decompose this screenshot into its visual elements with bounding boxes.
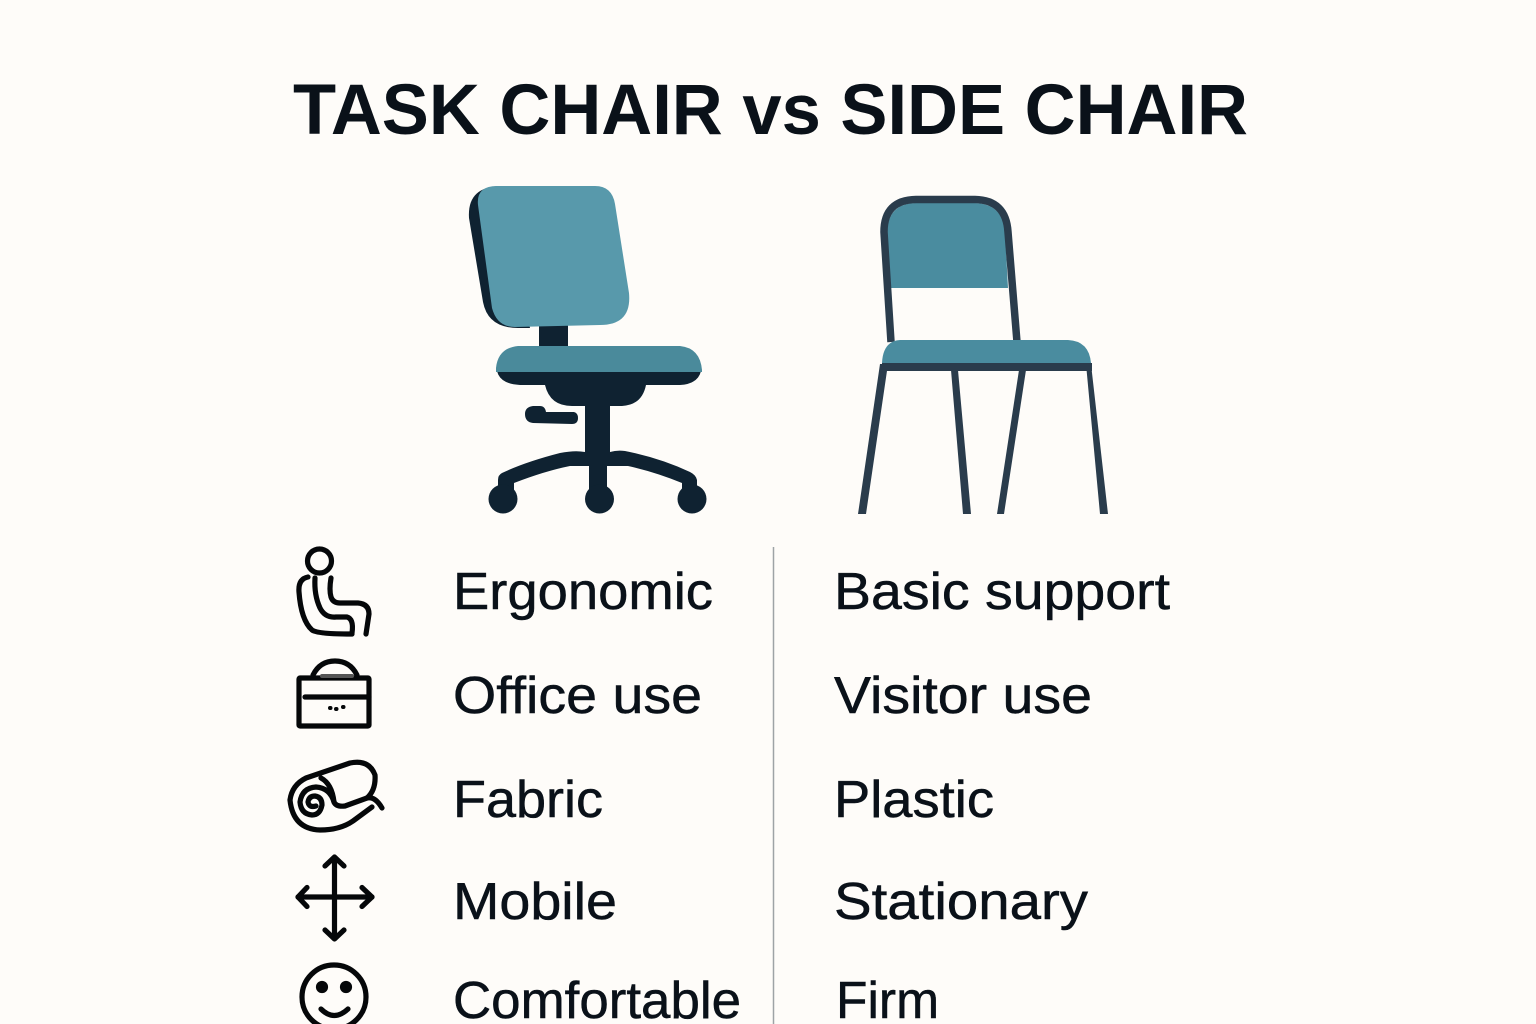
right column labels: Visitor use: [834, 667, 1092, 725]
left column labels: Mobile: [453, 873, 617, 931]
illustration: side chair: [858, 200, 1108, 514]
icon: smiley: [302, 965, 366, 1024]
left column labels: Ergonomic: [453, 563, 713, 621]
left column labels: Fabric: [453, 771, 603, 829]
icon: four-way arrows: [298, 857, 372, 939]
left column labels: Office use: [453, 667, 702, 725]
left column labels: [453, 563, 741, 1024]
icon: briefcase: [299, 661, 369, 726]
divider: [772, 547, 774, 1024]
icon: seated person: [299, 549, 369, 634]
illustration: task chair: [469, 186, 706, 514]
title: TASK CHAIR vs SIDE CHAIR: [293, 71, 1248, 150]
right column labels: Stationary: [834, 873, 1088, 931]
icon: fabric roll: [290, 762, 382, 830]
right column labels: Basic support: [834, 563, 1171, 621]
right column labels: [834, 563, 1171, 1024]
right column labels: Plastic: [834, 771, 994, 829]
